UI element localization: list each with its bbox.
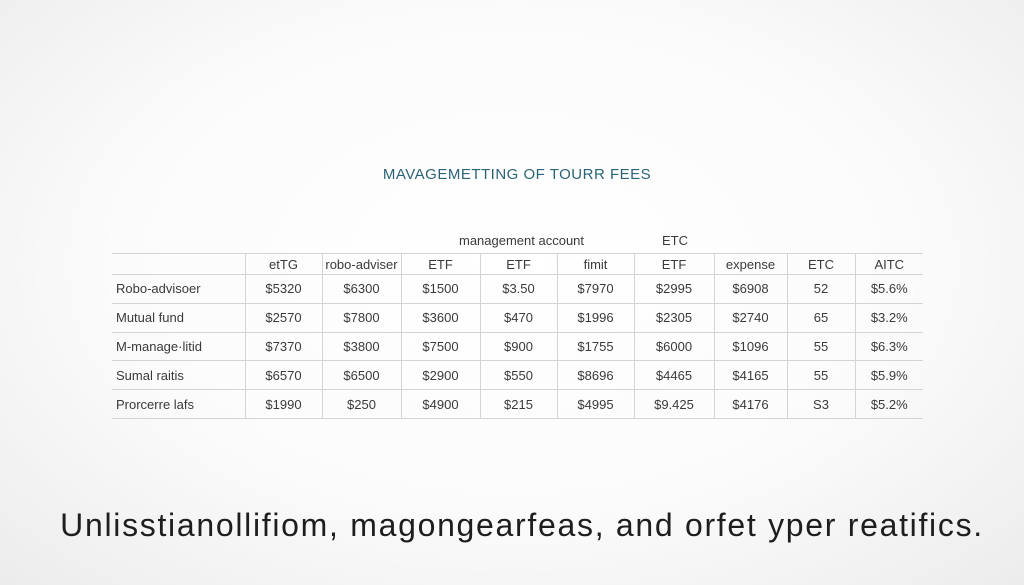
fee table: $5.2% (871, 397, 908, 412)
fee table: $900 (504, 339, 533, 354)
fee table: $9.425 (654, 397, 694, 412)
fee table: S3 (813, 397, 829, 412)
fee table: $4176 (732, 397, 769, 412)
fee table: $250 (347, 397, 376, 412)
fee table: 55 (814, 339, 828, 354)
fee table: $7370 (265, 339, 302, 354)
fee table: $4995 (577, 397, 614, 412)
fee table: Sumal raitis (116, 368, 184, 383)
group header: ETC: ETC (662, 233, 688, 248)
fee table: $7970 (577, 281, 614, 296)
fee table: etTG (269, 256, 298, 272)
fee table: expense (726, 256, 775, 272)
fee table: $3.50 (502, 281, 535, 296)
fee table: $2900 (422, 368, 459, 383)
fee table: $1500 (422, 281, 459, 296)
fee table (112, 253, 923, 419)
fee table: $4165 (732, 368, 769, 383)
fee table: $6300 (343, 281, 380, 296)
fee table: $5.6% (871, 281, 908, 296)
fee table: 55 (814, 368, 828, 383)
fee table: M-manage·litid (116, 339, 202, 354)
fee table: $3.2% (871, 310, 908, 325)
fee table: $2570 (265, 310, 302, 325)
fee table: ETF (506, 256, 531, 272)
fee table: $6.3% (871, 339, 908, 354)
fee table: $215 (504, 397, 533, 412)
fee table: $6570 (265, 368, 302, 383)
fee table: $470 (504, 310, 533, 325)
fee table: $6500 (343, 368, 380, 383)
fee table: $8696 (577, 368, 614, 383)
fee table: $1990 (265, 397, 302, 412)
fee table: $7500 (422, 339, 459, 354)
fee table: fimit (584, 256, 607, 272)
fee table: $2305 (656, 310, 692, 325)
fee table: 52 (814, 281, 828, 296)
fee table: $6000 (656, 339, 692, 354)
fee table: ETF (428, 256, 453, 272)
fee table: $2995 (656, 281, 692, 296)
fee table: $3600 (422, 310, 459, 325)
fee table: $4465 (656, 368, 692, 383)
fee table: $2740 (732, 310, 769, 325)
fee table: robo-adviser (325, 256, 398, 272)
fee table: $3800 (343, 339, 380, 354)
caption: Unlisstianollifiom, magongearfeas, and orfet yper reatifics. (60, 507, 984, 543)
fee table: $1755 (577, 339, 614, 354)
fee table: $4900 (422, 397, 459, 412)
group header: management account: management account (459, 233, 584, 248)
fee table: ETC (808, 256, 834, 272)
fee table: Mutual fund (116, 310, 184, 325)
fee table: $5.9% (871, 368, 908, 383)
fee table: ETF (662, 256, 686, 272)
fee table: Robo-advisoer (116, 281, 201, 296)
fee table: $6908 (732, 281, 769, 296)
fee table: $7800 (343, 310, 380, 325)
title: MAVAGEMETTING OF TOURR FEES (383, 166, 651, 183)
fee table: $1996 (577, 310, 614, 325)
fee table: Prorcerre lafs (116, 397, 194, 412)
fee table: AITC (874, 256, 904, 272)
fee table: 65 (814, 310, 828, 325)
fee table: $550 (504, 368, 533, 383)
fee table: $1096 (732, 339, 769, 354)
fee table: $5320 (265, 281, 302, 296)
